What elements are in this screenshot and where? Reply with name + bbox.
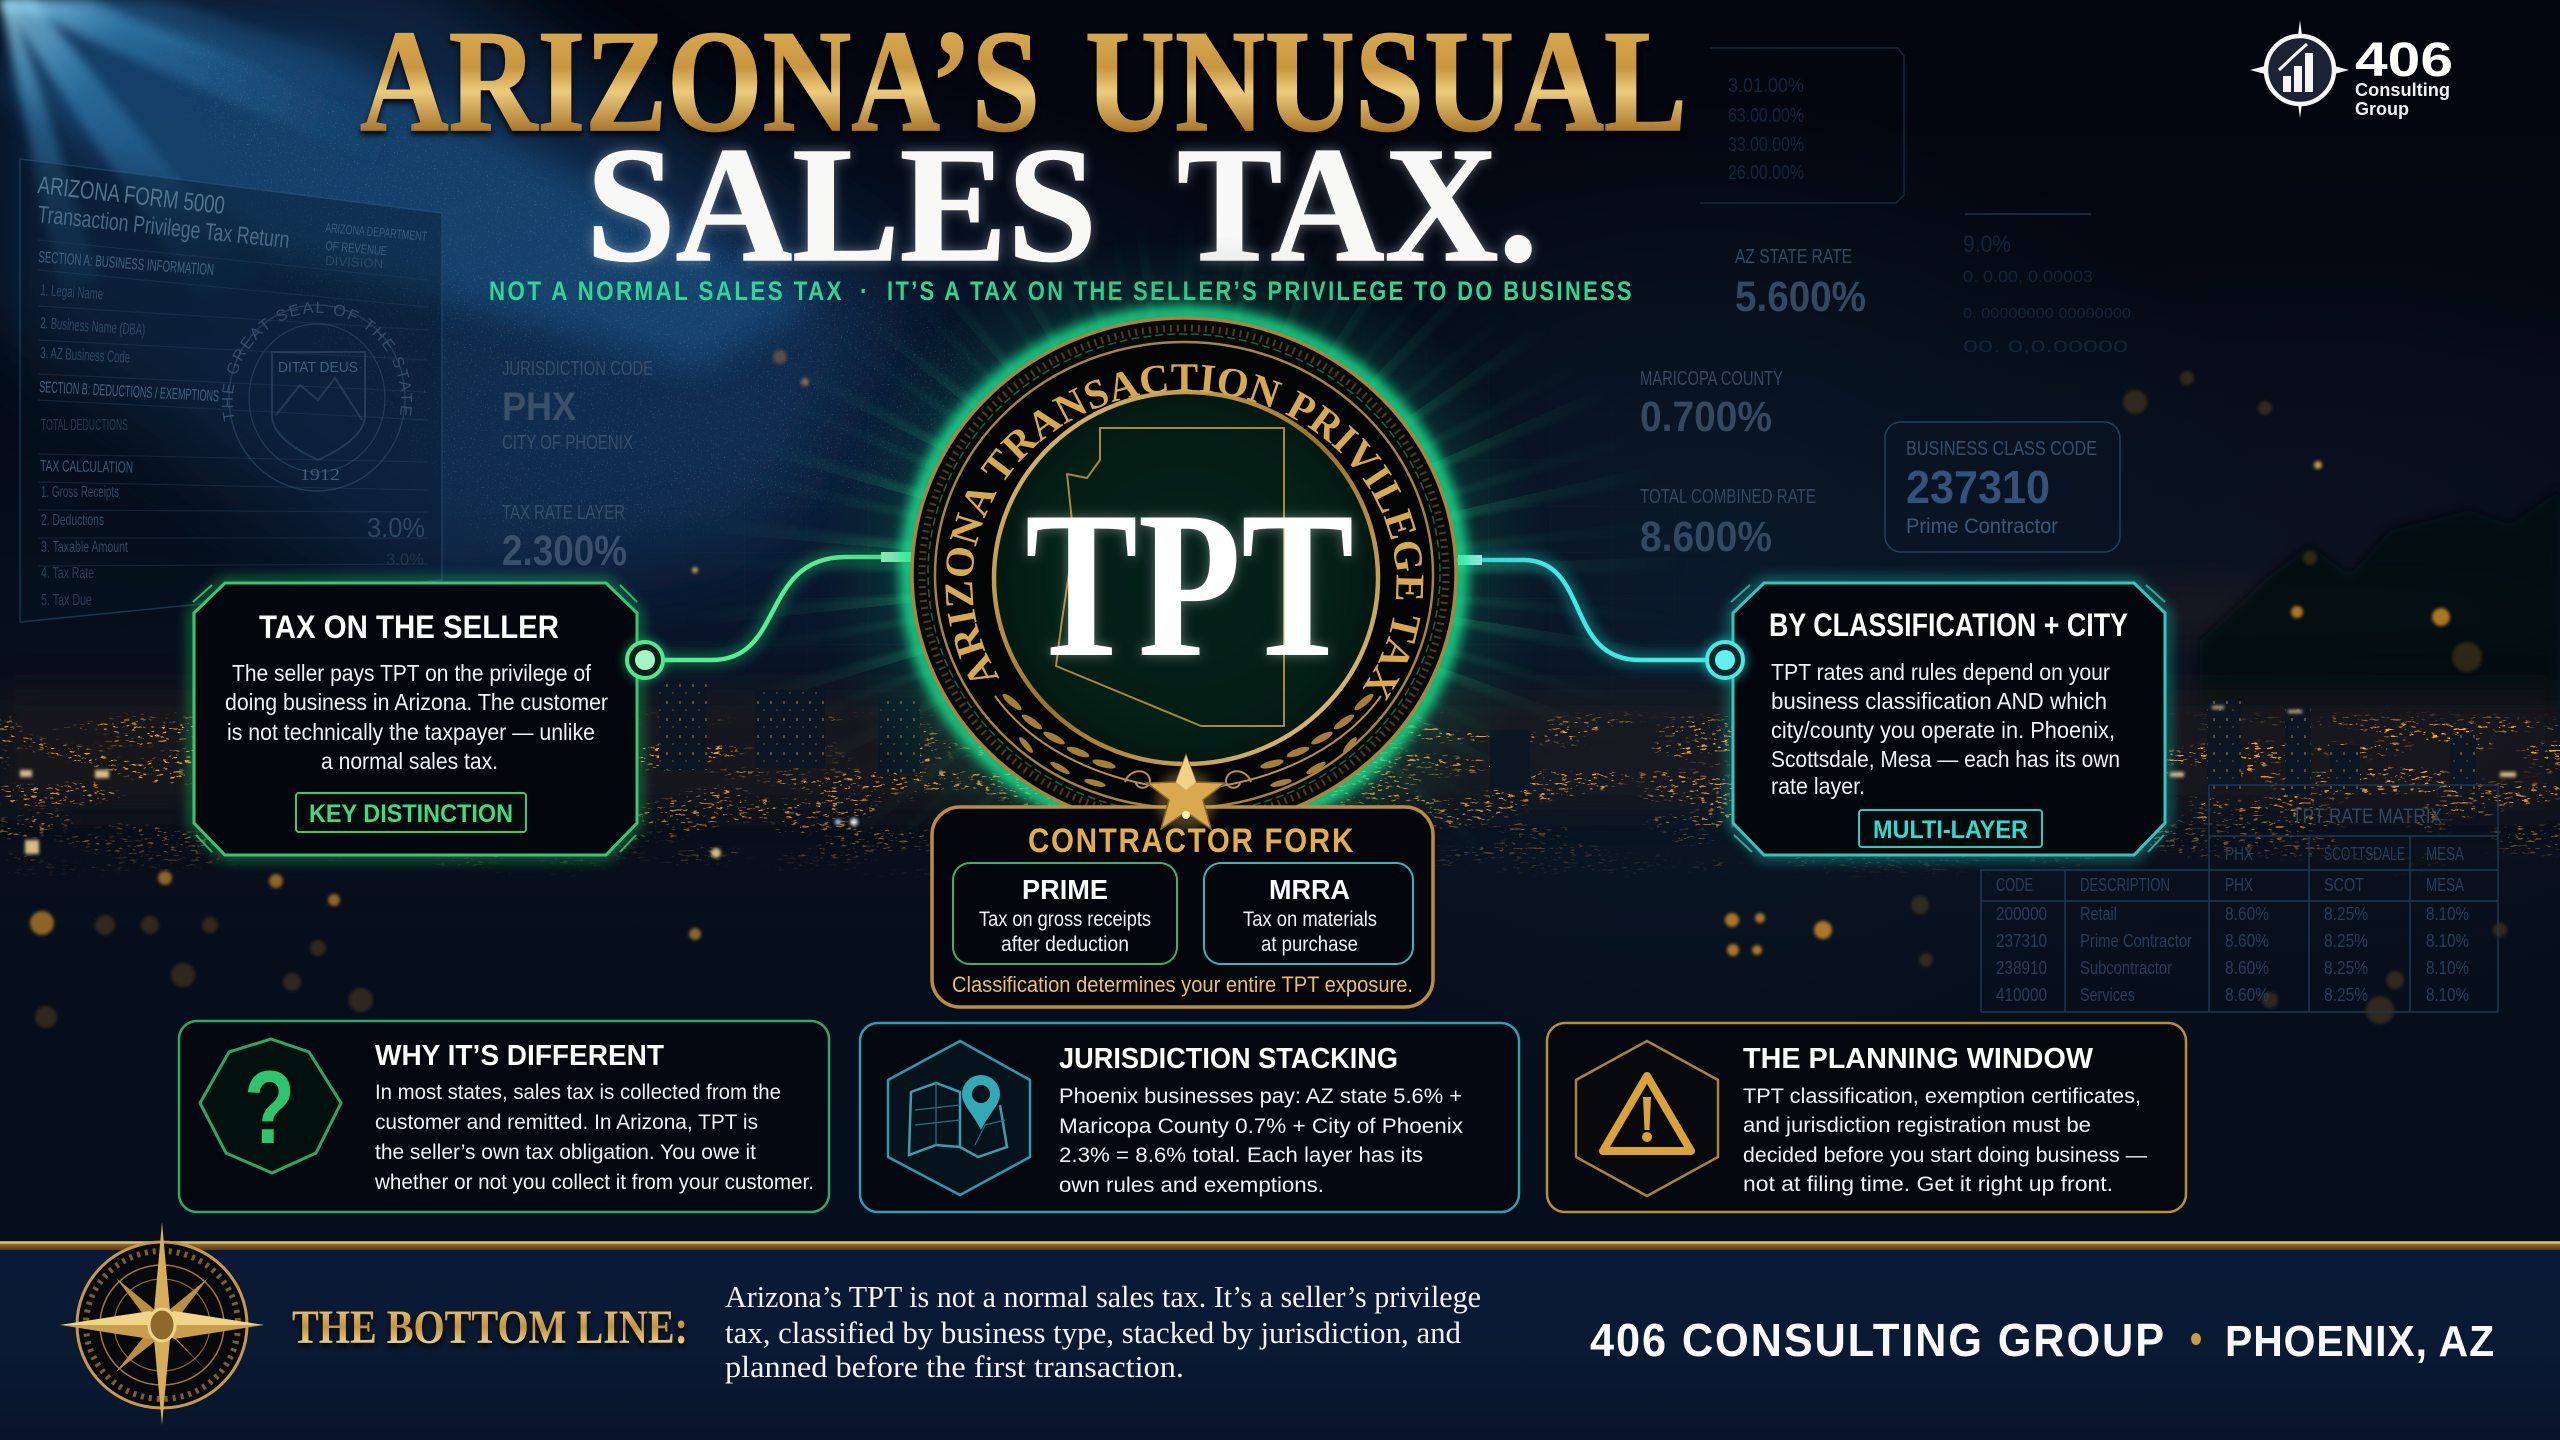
ghost table: TPT rate matrix: 8.10% [2426, 958, 2469, 978]
ghost table: TPT rate matrix: Prime Contractor [2080, 931, 2192, 951]
state seal watermark: DITAT DEUS [278, 359, 358, 376]
connector: seal to seller panel [660, 552, 911, 660]
body [1743, 1085, 2147, 1196]
ghost table: TPT rate matrix: SCOT [2324, 875, 2364, 895]
panel body [225, 660, 608, 774]
ghost table: TPT rate matrix: 8.10% [2426, 985, 2469, 1005]
background: blue light beam from top-left [0, 0, 993, 593]
background: bokeh lights [30, 350, 2507, 1028]
Arizona outline [1056, 428, 1284, 726]
form rows: 3. AZ Business Code [40, 345, 131, 367]
title: line two [586, 113, 1538, 296]
ghost data: rates at right: 33.00.00% [1728, 134, 1804, 156]
ghost data: rates at right: 0. 00000000 00000000 [1963, 305, 2131, 322]
form rows: 4. Tax Rate [41, 565, 94, 582]
panel: by classification + city [1731, 583, 2165, 855]
ghost table: TPT rate matrix: 238910 [1996, 958, 2047, 978]
body [374, 1081, 814, 1194]
panel body: a normal sales tax. [321, 748, 498, 774]
card: mrra [1204, 863, 1413, 964]
ghost data: rates at right: TOTAL COMBINED RATE [1640, 486, 1816, 508]
subtitle [489, 276, 1634, 306]
state seal watermark [222, 302, 412, 492]
body: Phoenix businesses pay: AZ state 5.6% + [1059, 1085, 1462, 1108]
panel: contractor fork [932, 807, 1433, 1007]
ghost table: TPT rate matrix: Subcontractor [2080, 958, 2172, 978]
form rows [38, 220, 428, 609]
subtitle: NOT A NORMAL SALES TAX [489, 276, 844, 306]
panel body: business classification AND which [1771, 688, 2107, 714]
ghost data: jurisdiction code: CITY OF PHOENIX [502, 432, 633, 454]
ghost table: TPT rate matrix: PHX [2225, 844, 2253, 864]
card: prime [953, 863, 1177, 964]
ghost table: TPT rate matrix: SCOTTSDALE [2324, 844, 2405, 864]
form rows: 3. Taxable Amount [41, 539, 128, 556]
title: line one [360, 0, 1687, 162]
panel body: city/county you operate in. Phoenix, [1771, 717, 2115, 743]
seal ring text: ARIZONA TRANSACTION PRIVILEGE TAX [945, 364, 1424, 701]
icon: gold compass rose [60, 1222, 264, 1425]
background: teal grid behind seal [794, 428, 1574, 657]
form subtitle: Transaction Privilege Tax Return [36, 201, 291, 254]
ghost table: TPT rate matrix: 8.10% [2426, 904, 2469, 924]
panel body: TPT rates and rules depend on your [1771, 659, 2110, 685]
body: decided before you start doing business — [1743, 1144, 2147, 1167]
card: mrra: Tax on materials [1243, 908, 1377, 931]
ghost table: TPT rate matrix: Services [2080, 985, 2135, 1005]
form rows: OF REVENUE [325, 238, 388, 258]
body: the seller’s own tax obligation. You owe it [375, 1141, 756, 1164]
title: line one: UNUSUAL [1085, 0, 1687, 162]
form rows: SECTION A: BUSINESS INFORMATION [38, 249, 214, 279]
form rows: 3.0% [386, 550, 424, 569]
TPT lettering: TPT [1025, 469, 1354, 701]
ghost table: TPT rate matrix: 410000 [1996, 985, 2047, 1005]
ghost data: rates at right: 63.00.00% [1728, 105, 1804, 127]
form rows: ARIZONA DEPARTMENT [325, 220, 428, 244]
footer brand line: 406 CONSULTING GROUP [1590, 1314, 2166, 1366]
form rows: 3.0% [367, 512, 425, 543]
form rows: 2. Business Name (DBA) [40, 315, 146, 339]
form rows: DIVISION [325, 253, 384, 271]
body: whether or not you collect it from your customer. [374, 1171, 814, 1194]
panel: why it's different [179, 1021, 829, 1212]
badge: key distinction [296, 793, 526, 832]
form rows: TOTAL DEDUCTIONS [41, 417, 128, 434]
ghost panel: business class code: Prime Contractor [1906, 515, 2058, 538]
body: and jurisdiction registration must be [1743, 1114, 2091, 1137]
card: prime: Tax on gross receipts [979, 908, 1151, 931]
ghost data: jurisdiction code: JURISDICTION CODE [502, 358, 653, 380]
panel: jurisdiction stacking [860, 1023, 1519, 1212]
form rows: TAX CALCULATION [40, 458, 133, 477]
background: city skyline and lights [0, 680, 2560, 880]
node: left connector [624, 639, 666, 681]
panel body: is not technically the taxpayer — unlike [227, 719, 595, 745]
ghost table: TPT rate matrix: PHX [2225, 875, 2253, 895]
ghost table: TPT rate matrix: CODE [1996, 875, 2033, 895]
title: line one: ARIZONA’S [360, 0, 1040, 162]
callout: classification note: Classification determines your entire TPT exposure. [952, 972, 1413, 997]
ghost data: rates at right: 9.0% [1963, 231, 2011, 258]
ghost data: rates at right: 8.600% [1640, 513, 1772, 561]
form title: ARIZONA FORM 5000 [36, 171, 226, 220]
heading: contractor fork: CONTRACTOR FORK [1028, 822, 1355, 860]
ghost data: jurisdiction code: TAX RATE LAYER [502, 502, 625, 524]
title: line two: SALES [586, 113, 1097, 296]
seal: Arizona Transaction Privilege Tax [844, 249, 1528, 806]
body: 2.3% = 8.6% total. Each layer has its [1059, 1144, 1423, 1167]
ghost table: TPT rate matrix: 8.60% [2225, 985, 2269, 1005]
ghost data: rates at right [1640, 48, 2131, 561]
ghost table: TPT rate matrix: 8.60% [2225, 904, 2269, 924]
ghost panel: business class code [1885, 422, 2120, 552]
footer band [0, 1241, 2560, 1440]
panel heading: BY CLASSIFICATION + CITY [1769, 607, 2128, 643]
panel: the planning window [1547, 1023, 2186, 1212]
ghost data: jurisdiction code: PHX [502, 385, 576, 429]
icon: question octagon: ? [244, 1050, 295, 1166]
heading: JURISDICTION STACKING [1059, 1043, 1398, 1075]
panel: tax on the seller [193, 583, 637, 855]
footer summary text: tax, classified by business type, stacked by jurisdiction, and [725, 1315, 1461, 1350]
badge: multi-layer: MULTI-LAYER [1873, 816, 2028, 844]
ghost panel: business class code: BUSINESS CLASS CODE [1906, 438, 2097, 460]
card: prime: PRIME [1022, 874, 1108, 905]
ghost table: TPT rate matrix: 8.25% [2324, 931, 2368, 951]
ghost table: TPT rate matrix: 8.60% [2225, 958, 2269, 978]
ghost data: rates at right: MARICOPA COUNTY [1640, 368, 1783, 390]
body: own rules and exemptions. [1059, 1174, 1324, 1197]
body: TPT classification, exemption certificates, [1743, 1085, 2141, 1108]
subtitle: IT’S A TAX ON THE SELLER’S PRIVILEGE TO DO BUSINESS [887, 276, 1634, 306]
heading: THE PLANNING WINDOW [1743, 1043, 2094, 1075]
form rows: 5. Tax Due [41, 592, 92, 609]
ghost table: TPT rate matrix: MESA [2426, 875, 2464, 895]
footer summary text: Arizona’s TPT is not a normal sales tax. It’s a seller’s privilege [725, 1279, 1481, 1314]
laurel right [1221, 692, 1381, 789]
title: line two: TAX. [1177, 113, 1538, 296]
node: right connector [1703, 638, 1747, 682]
icon: question octagon [200, 1039, 341, 1173]
ghost data: rates at right: 0.700% [1640, 393, 1772, 441]
body: not at filing time. Get it right up front. [1743, 1173, 2113, 1196]
connector: seal to classification panel [1458, 555, 1710, 660]
panel body: The seller pays TPT on the privilege of [232, 660, 592, 686]
logo: 406 Consulting Group: Consulting [2355, 80, 2450, 100]
body: Maricopa County 0.7% + City of Phoenix [1059, 1115, 1464, 1138]
body: customer and remitted. In Arizona, TPT is [375, 1111, 758, 1134]
background: clouds and mountains at right [1950, 490, 2560, 710]
ghost data: rates at right: 3.01.00% [1728, 75, 1804, 97]
logo: 406 Consulting Group: 406 [2355, 34, 2453, 87]
card: prime: after deduction [1001, 933, 1129, 956]
subtitle: · [860, 276, 870, 306]
ghost data: rates at right: AZ STATE RATE [1735, 246, 1852, 268]
icon: map pin hexagon [888, 1041, 1030, 1195]
panel body: Scottsdale, Mesa — each has its own [1771, 746, 2120, 772]
form rows: 1. Gross Receipts [41, 484, 119, 501]
panel heading: TAX ON THE SELLER [259, 609, 559, 645]
body [1059, 1085, 1464, 1197]
panel body: rate layer. [1771, 773, 1865, 799]
ghost table: TPT rate matrix: DESCRIPTION [2080, 875, 2170, 895]
ghost data: rates at right: 5.600% [1735, 273, 1866, 321]
ghost table: TPT rate matrix: Retail [2080, 904, 2117, 924]
form rows: 2. Deductions [41, 512, 104, 529]
icon: warning hexagon [1576, 1041, 1718, 1196]
ghost table: TPT rate matrix: 8.25% [2324, 904, 2368, 924]
laurel left [995, 692, 1155, 789]
panel body: doing business in Arizona. The customer [225, 689, 608, 715]
seal inner disc [994, 392, 1378, 764]
icon: gold star [1147, 755, 1225, 830]
ghost table: TPT rate matrix: MESA [2426, 844, 2464, 864]
form rows: 1. Legal Name [40, 282, 104, 303]
ghost table: TPT rate matrix: TPT RATE MATRIX [2292, 805, 2442, 828]
footer label: the bottom line: THE BOTTOM LINE: [292, 1301, 688, 1354]
ghost table: TPT rate matrix [1981, 785, 2498, 1012]
ghost panel: Arizona Form 5000 [19, 158, 443, 623]
ghost table: TPT rate matrix: 8.10% [2426, 931, 2469, 951]
logo: 406 Consulting Group [2250, 20, 2453, 119]
ghost table: TPT rate matrix: 8.25% [2324, 958, 2368, 978]
ghost data: rates at right: 00. 0,0.00000 [1963, 337, 2128, 356]
footer brand line [1590, 1314, 2495, 1366]
footer brand line: PHOENIX, AZ [2225, 1317, 2495, 1366]
background: green light rays behind seal [757, 266, 1612, 805]
panel body [1771, 659, 2120, 799]
form rows: SECTION B: DEDUCTIONS / EXEMPTIONS [39, 379, 219, 405]
footer summary text: planned before the first transaction. [725, 1349, 1184, 1384]
ghost table: TPT rate matrix: 8.25% [2324, 985, 2368, 1005]
ghost table: TPT rate matrix: 237310 [1996, 931, 2047, 951]
footer summary text [725, 1279, 1481, 1384]
badge: key distinction: KEY DISTINCTION [309, 800, 513, 828]
logo: 406 Consulting Group: Group [2355, 99, 2409, 119]
ghost table: TPT rate matrix: 8.60% [2225, 931, 2269, 951]
ghost table: TPT rate matrix: 200000 [1996, 904, 2047, 924]
ghost panel: business class code: 237310 [1906, 461, 2050, 513]
ghost data: rates at right: 0. 0.00, 0.00003 [1963, 267, 2093, 286]
ghost data: rates at right: 26.00.00% [1728, 162, 1804, 184]
card: mrra: at purchase [1261, 933, 1358, 956]
state seal watermark: 1912 [300, 465, 340, 484]
heading: WHY IT’S DIFFERENT [375, 1040, 664, 1072]
ghost data: jurisdiction code [502, 358, 653, 575]
ghost data: jurisdiction code: 2.300% [502, 527, 627, 575]
card: mrra: MRRA [1269, 874, 1350, 905]
badge: multi-layer [1859, 810, 2042, 847]
body: In most states, sales tax is collected from the [375, 1081, 781, 1104]
